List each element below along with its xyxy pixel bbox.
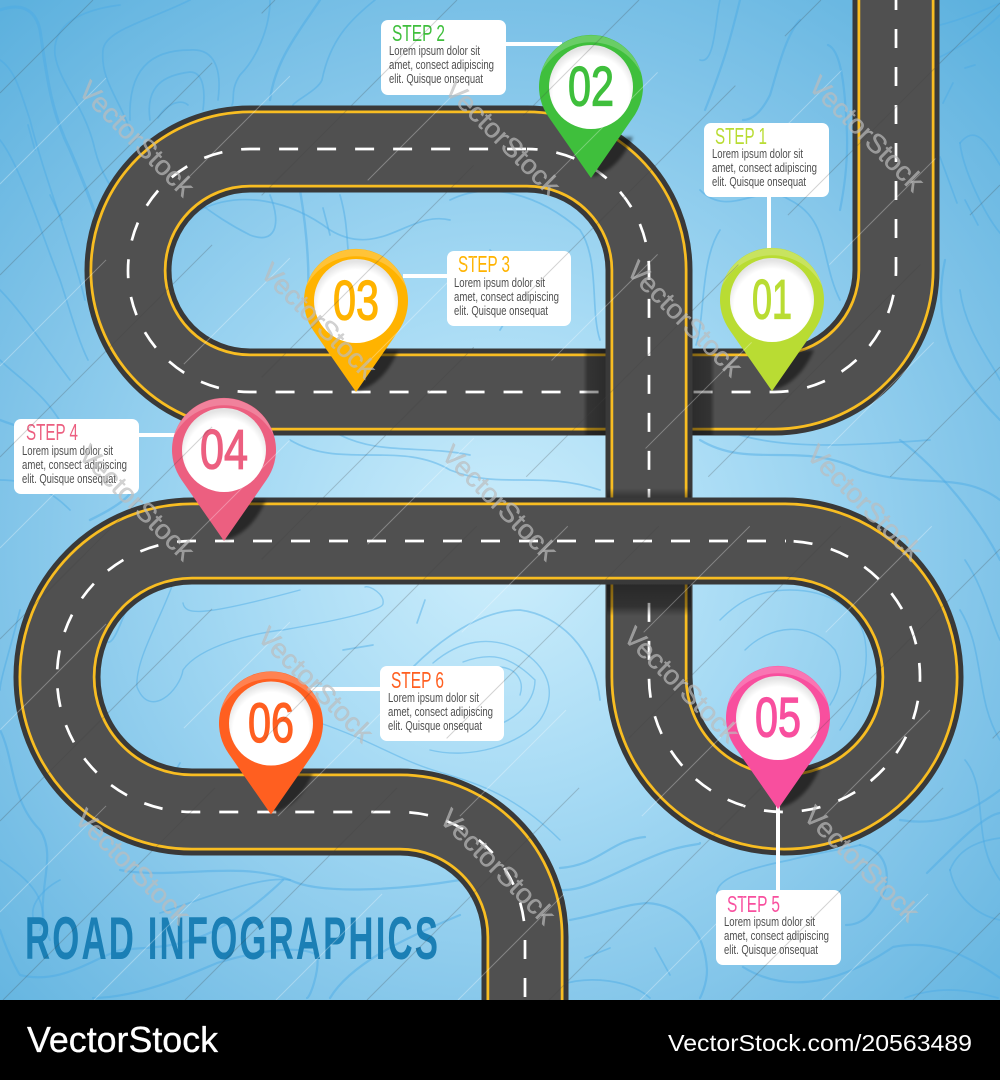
step 4 card: amet, consect adipiscing — [22, 458, 127, 472]
pin 06: 06 — [248, 691, 294, 754]
watermarks — [69, 70, 930, 931]
watermarks: VectorStock — [69, 803, 196, 931]
watermarks: VectorStock — [803, 70, 930, 198]
step 5 card: Lorem ipsum dolor sit — [724, 915, 815, 929]
step 4 card: Lorem ipsum dolor sit — [22, 444, 113, 458]
road section: long horizontal and left loop to bottom — [57, 541, 786, 1000]
footer logo text: VectorStock — [27, 1019, 219, 1060]
pin 01 — [720, 248, 824, 391]
road section: vertical descent and right loop — [527, 149, 920, 812]
step 1 card — [704, 123, 829, 197]
pin 05 — [726, 666, 830, 809]
footer bar — [0, 1000, 1000, 1080]
step 3 card: STEP 3 — [458, 251, 510, 277]
step 2 card — [381, 20, 506, 95]
step 3 card: Lorem ipsum dolor sit — [454, 276, 545, 290]
pin 02: 02 — [568, 54, 614, 118]
step 1 card: elit. Quisque onsequat — [712, 175, 806, 189]
step 6 card: Lorem ipsum dolor sit — [388, 691, 479, 705]
watermarks: VectorStock — [434, 803, 561, 931]
watermarks: VectorStock — [618, 621, 745, 749]
step 2 card: elit. Quisque onsequat — [389, 72, 483, 86]
step 5 card: STEP 5 — [727, 891, 780, 917]
watermarks: VectorStock — [798, 800, 925, 928]
underpass shadows on vertical road — [607, 488, 691, 616]
watermarks: VectorStock — [255, 257, 382, 385]
connector lines — [136, 44, 778, 892]
step 4 card — [14, 419, 139, 494]
step 5 card — [716, 890, 841, 965]
watermarks: VectorStock — [73, 439, 200, 567]
step 4 card: STEP 4 — [26, 419, 78, 445]
step 5 card: elit. Quisque onsequat — [724, 943, 818, 957]
title: ROAD INFOGRAPHICS — [25, 906, 438, 972]
step 1 card: amet, consect adipiscing — [712, 161, 817, 175]
step 3 card: elit. Quisque onsequat — [454, 304, 548, 318]
step 4 card: elit. Quisque onsequat — [22, 472, 116, 486]
road network — [57, 0, 920, 1000]
watermarks: VectorStock — [439, 74, 566, 202]
step 6 card: STEP 6 — [391, 667, 444, 693]
road section: upper loop — [128, 0, 896, 392]
watermarks: VectorStock — [621, 255, 748, 383]
watermarks: VectorStock — [73, 75, 200, 203]
watermarks: VectorStock — [252, 621, 379, 749]
step 2 card: STEP 2 — [392, 20, 445, 46]
pin 03: 03 — [333, 268, 379, 332]
pin 04 — [172, 398, 276, 541]
step 1 card: Lorem ipsum dolor sit — [712, 147, 803, 161]
pin 05: 05 — [755, 686, 801, 748]
underpass shadows on upper road — [583, 349, 715, 435]
pin 03 — [304, 249, 408, 392]
pin 06 — [219, 671, 323, 814]
step 1 card: STEP 1 — [715, 123, 767, 149]
step 6 card: elit. Quisque onsequat — [388, 719, 482, 733]
step 3 card: amet, consect adipiscing — [454, 290, 559, 304]
watermarks: VectorStock — [436, 439, 563, 567]
pin 01: 01 — [752, 268, 792, 330]
pin 04: 04 — [200, 418, 248, 480]
step 6 card: amet, consect adipiscing — [388, 705, 493, 719]
step 5 card: amet, consect adipiscing — [724, 929, 829, 943]
footer url text: VectorStock.com/20563489 — [668, 1030, 972, 1056]
watermarks: VectorStock — [801, 439, 928, 567]
step 6 card — [380, 666, 504, 741]
step 3 card — [447, 251, 571, 326]
step 2 card: amet, consect adipiscing — [389, 58, 494, 72]
step 2 card: Lorem ipsum dolor sit — [389, 44, 480, 58]
pin 02 — [539, 35, 643, 178]
